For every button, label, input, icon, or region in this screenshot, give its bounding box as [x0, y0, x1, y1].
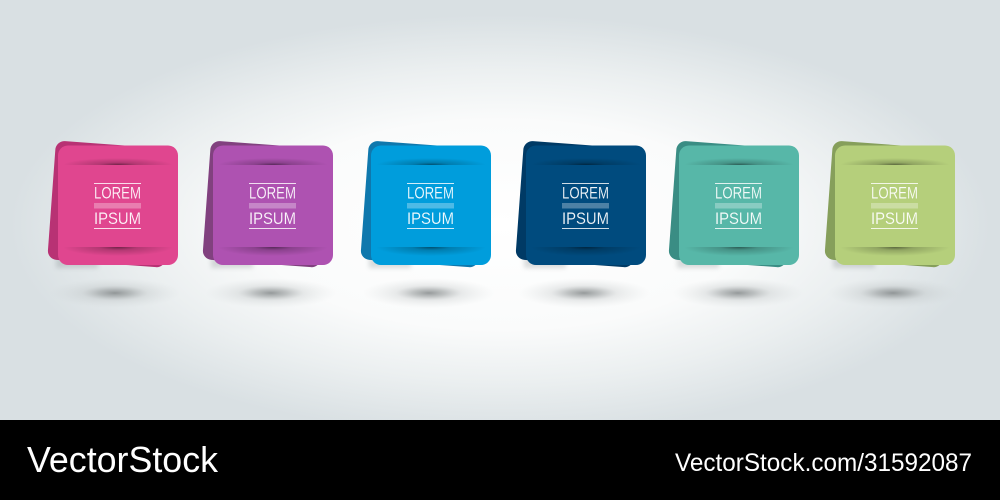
bottom slot shadow: [531, 247, 641, 256]
bottom slot shadow: [840, 247, 950, 256]
front sheet: [679, 146, 799, 265]
label: LOREM: [715, 184, 762, 203]
footer band: [0, 420, 1000, 500]
label: IPSUM: [407, 209, 454, 228]
top slot shadow: [376, 158, 486, 165]
label: IPSUM: [871, 209, 918, 228]
back sheet: [824, 140, 951, 268]
panel: light blue card: [360, 140, 491, 268]
label: LOREM: [94, 184, 141, 203]
bottom slot shadow: [63, 247, 173, 256]
floor shadows: [49, 278, 959, 308]
panel: navy card: [515, 140, 646, 268]
panel: green card: [824, 140, 955, 268]
label: [94, 183, 141, 229]
front sheet: [526, 146, 646, 265]
panel: teal card: [668, 140, 799, 268]
label: LOREM: [249, 184, 296, 203]
label: IPSUM: [715, 209, 762, 228]
top slot shadow: [840, 158, 950, 165]
front sheet: [835, 146, 955, 265]
label: IPSUM: [562, 209, 609, 228]
top slot shadow: [218, 158, 328, 165]
front sheet: [213, 146, 333, 265]
front sheet: [58, 146, 178, 265]
top slot shadow: [684, 158, 794, 165]
panel: pink card: [47, 140, 178, 268]
label: IPSUM: [249, 209, 296, 228]
back sheet: [202, 140, 329, 268]
back sheet: [360, 140, 487, 268]
panel: purple card: [202, 140, 333, 268]
bottom slot shadow: [218, 247, 328, 256]
back sheet: [668, 140, 795, 268]
top slot shadow: [63, 158, 173, 165]
top slot shadow: [531, 158, 641, 165]
label: IPSUM: [94, 209, 141, 228]
back sheet: [47, 140, 174, 268]
label: LOREM: [407, 184, 454, 203]
back sheet: [515, 140, 642, 268]
image url: VectorStock.com/31592087: [675, 449, 972, 477]
label: [407, 183, 454, 229]
front sheet: [371, 146, 491, 265]
label: [871, 183, 918, 229]
label: [715, 183, 762, 229]
bottom slot shadow: [376, 247, 486, 256]
label: [249, 183, 296, 229]
label: [562, 183, 609, 229]
label: LOREM: [562, 184, 609, 203]
bottom slot shadow: [684, 247, 794, 256]
brand name: VectorStock: [27, 439, 219, 480]
label: LOREM: [871, 184, 918, 203]
